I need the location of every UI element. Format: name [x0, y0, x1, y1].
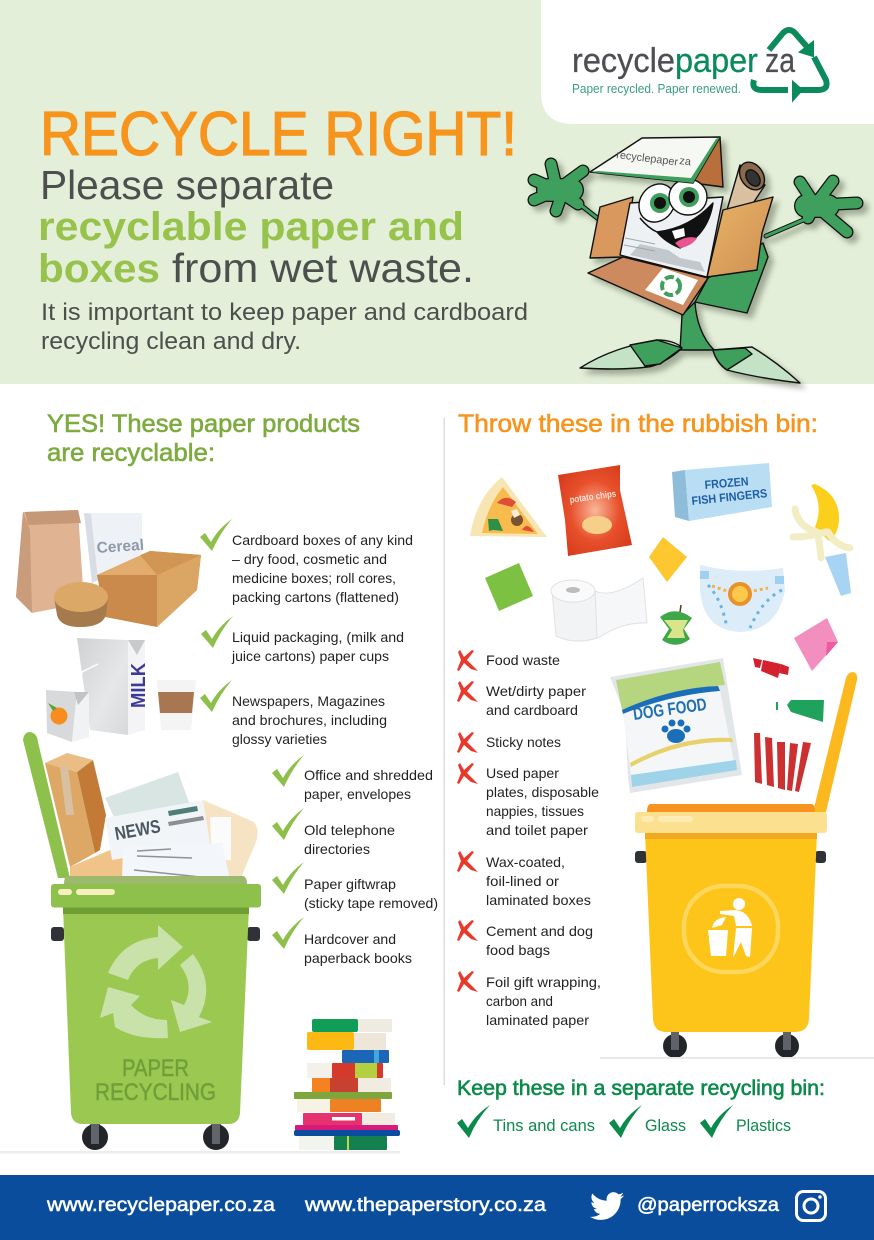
bin lid band — [635, 812, 827, 833]
text: office paper: paper, envelopes — [304, 786, 411, 802]
text: books: paperback books — [304, 950, 412, 966]
mascot face: eyes and mouth — [632, 177, 713, 248]
heading: boxes from wet waste — [38, 245, 474, 291]
text: wet paper: Wet/dirty paper — [486, 683, 586, 699]
heading: boxes from wet waste: boxes — [38, 247, 160, 291]
icon: cross 1 — [457, 650, 478, 671]
illustration: dog food bag — [610, 658, 742, 793]
cardboard carton — [97, 551, 201, 627]
milk carton — [77, 638, 150, 735]
text: office paper — [304, 767, 433, 802]
nappy — [700, 565, 785, 632]
text: giftwrap: (sticky tape removed) — [304, 895, 438, 911]
item: plastics: Plastics — [736, 1117, 791, 1135]
item: glass: Glass — [645, 1117, 686, 1135]
text: cement bags — [486, 923, 593, 958]
illustration: paper bag, cereal box, round core and carton — [16, 510, 201, 627]
bin body — [63, 907, 249, 1124]
bin body — [645, 833, 817, 1032]
text: wax-coated: Wax-coated, — [486, 854, 565, 870]
bin lid top — [64, 876, 247, 884]
check 5 — [272, 808, 304, 840]
icon: cross 2 — [457, 681, 478, 702]
text: foil gift wrapping — [486, 974, 601, 1028]
bin label: PAPER — [122, 1055, 189, 1082]
heading: please separate: Please separate — [40, 162, 334, 208]
panel: header background — [0, 0, 874, 384]
heading: yes recyclable: YES! These paper products — [47, 410, 360, 438]
text: wet paper — [486, 683, 586, 718]
icon: paw — [662, 720, 690, 743]
paper cup — [157, 680, 196, 730]
banana peel — [793, 484, 850, 558]
bin handles — [635, 851, 826, 863]
chips packet: potato chips — [569, 489, 617, 506]
text: cardboard boxes: packing cartons (flattened) — [232, 589, 399, 605]
icon: cross 3 — [457, 732, 478, 753]
text: giftwrap — [304, 876, 438, 911]
illustration: green paper recycling bin — [23, 732, 261, 1150]
item: glass — [609, 1105, 686, 1138]
icon: recycling arrows — [100, 925, 212, 1038]
heading: rubbish bin: Throw these in the rubbish bin: — [458, 410, 818, 438]
paper cup blue — [825, 553, 851, 596]
round cardboard core — [54, 582, 108, 627]
text: cardboard boxes — [232, 532, 413, 605]
milk carton: MILK — [128, 663, 150, 708]
logo: recyclepaper za: recycle — [572, 42, 675, 80]
mascot hat: recyclepaper — [616, 149, 679, 169]
bin lid top — [647, 804, 815, 812]
text: cardboard boxes: Cardboard boxes of any kind — [232, 532, 413, 548]
paint tube — [776, 700, 824, 722]
lid highlights — [641, 816, 693, 822]
text: intro: recycling clean and dry. — [41, 328, 301, 355]
text: foil gift wrapping: carbon and — [486, 993, 553, 1009]
text: used plates: nappies, tissues — [486, 803, 584, 819]
bin handles — [51, 927, 260, 941]
illustration: rubbish items — [470, 463, 851, 792]
cereal box — [84, 513, 145, 583]
logo: recyclepaper za: Paper recycled. Paper renewed. — [572, 81, 741, 96]
check 1 — [200, 519, 232, 551]
check 2 — [201, 616, 233, 648]
text: used plates: Used paper — [486, 765, 559, 781]
check 4 — [272, 755, 304, 787]
mascot hat: za — [679, 155, 693, 169]
text: newspapers: and brochures, including — [232, 712, 387, 728]
text: wet paper: and cardboard — [486, 702, 578, 718]
text: food waste: Food waste — [486, 652, 560, 668]
bin wheels — [663, 1030, 799, 1058]
juice box — [46, 690, 89, 742]
icon: twitter — [590, 1192, 624, 1220]
bin label: RECYCLING — [95, 1079, 216, 1106]
check 7 — [272, 917, 304, 949]
check 6 — [272, 862, 304, 894]
green sticky note — [485, 563, 533, 611]
text: giftwrap: Paper giftwrap — [304, 876, 396, 892]
icon: cross 5 — [457, 851, 478, 872]
paper bag — [16, 510, 84, 613]
text: used plates: plates, disposable — [486, 784, 599, 800]
icon: instagram — [796, 1192, 826, 1220]
icon: cross 4 — [457, 763, 478, 784]
icon: cross 7 — [457, 971, 478, 992]
text: used plates — [486, 765, 599, 838]
illustration: dog food bag: DOG FOOD — [632, 694, 708, 724]
mascot leg and feet — [580, 302, 800, 383]
bin label — [95, 1055, 216, 1106]
item: plastics — [700, 1105, 791, 1138]
frozen fish fingers box: FROZEN — [704, 474, 749, 492]
panel: logo tab — [541, 0, 874, 124]
text: cement bags: food bags — [486, 942, 550, 958]
text: wax-coated: foil-lined or — [486, 873, 559, 889]
footer link: recyclepaper: www.recyclepaper.co.za — [46, 1194, 275, 1216]
text: newspapers: Newspapers, Magazines — [232, 693, 385, 709]
pink sticky note — [794, 618, 838, 671]
chips packet — [558, 465, 632, 556]
text: office paper: Office and shredded — [304, 767, 433, 783]
text: telephone directories — [304, 822, 395, 857]
mascot hat back — [693, 137, 723, 187]
yellow sticky note — [649, 537, 687, 582]
text: telephone directories: Old telephone — [304, 822, 395, 838]
mascot bottom flap with recycling label — [588, 257, 708, 315]
heading: boxes from wet waste: from wet waste. — [172, 245, 474, 291]
bin open lid — [23, 732, 70, 878]
heading: keep separate: Keep these in a separate recycling bin: — [457, 1077, 825, 1100]
footer handle: @paperrocksza — [637, 1194, 779, 1216]
text: intro: It is important to keep paper and cardboard — [41, 299, 528, 326]
frozen fish fingers box — [672, 463, 772, 521]
illustration: mascot — [534, 137, 857, 383]
paper in bin: NEWS — [113, 815, 162, 844]
heading: yes recyclable: are recyclable: — [47, 439, 215, 467]
text: cardboard boxes: – dry food, cosmetic and — [232, 551, 387, 567]
check 3 — [200, 680, 232, 712]
mascot arms and hands — [534, 164, 857, 236]
text: wax-coated — [486, 854, 591, 908]
popcorn box — [754, 733, 812, 792]
text: used plates: and toilet paper — [486, 822, 588, 838]
text: foil gift wrapping: laminated paper — [486, 1012, 589, 1028]
logo: recyclepaper za: za — [765, 42, 795, 80]
illustration: yellow rubbish bin — [635, 672, 857, 1058]
mascot box flaps — [590, 197, 633, 258]
toilet roll — [551, 578, 647, 641]
paper in bin — [45, 753, 258, 880]
text: newspapers: glossy varieties — [232, 731, 327, 747]
title: RECYCLE RIGHT! — [40, 100, 517, 169]
text: books — [304, 931, 412, 966]
text: newspapers — [232, 693, 387, 747]
candy wrapper — [753, 658, 789, 678]
text: books: Hardcover and — [304, 931, 396, 947]
illustration: cartons and paper cup — [46, 638, 196, 742]
bin lid band — [51, 884, 261, 908]
logo: recyclepaper za: paper — [675, 42, 758, 80]
lid highlights — [58, 889, 115, 895]
apple core — [660, 605, 692, 645]
text: foil gift wrapping: Foil gift wrapping, — [486, 974, 601, 990]
text: liquid packaging: Liquid packaging, (milk and — [232, 629, 404, 645]
heading: recyclable paper and: recyclable paper and — [38, 205, 464, 249]
frozen fish fingers box: FISH FINGERS — [691, 486, 768, 508]
icon: tidy man — [684, 886, 778, 972]
text: intro — [41, 299, 528, 355]
mascot hat — [590, 137, 720, 183]
cereal box: Cereal — [96, 537, 145, 557]
text: liquid packaging — [231, 629, 404, 664]
item: tins and cans — [457, 1105, 595, 1138]
heading: yes recyclable — [47, 410, 360, 467]
text: liquid packaging: juice cartons) paper cups — [231, 648, 389, 664]
icon: cross 6 — [457, 920, 478, 941]
bin wheels — [82, 1124, 229, 1150]
illustration: stack of books — [294, 1019, 400, 1150]
logo: recyclepaper za — [572, 30, 827, 100]
mascot newspaper — [620, 197, 723, 277]
mascot body — [695, 243, 768, 313]
bin handle — [813, 672, 857, 812]
text: cardboard boxes: medicine boxes; roll cores, — [232, 570, 396, 586]
text: cement bags: Cement and dog — [486, 923, 593, 939]
item: tins and cans: Tins and cans — [493, 1117, 595, 1135]
text: telephone directories: directories — [304, 841, 370, 857]
panel: footer — [0, 1175, 874, 1240]
text: sticky notes: Sticky notes — [486, 734, 561, 750]
pizza slice — [470, 477, 547, 537]
mascot cardboard tube — [727, 157, 770, 210]
footer link: thepaperstory: www.thepaperstory.co.za — [304, 1194, 546, 1216]
text: wax-coated: laminated boxes — [486, 892, 591, 908]
